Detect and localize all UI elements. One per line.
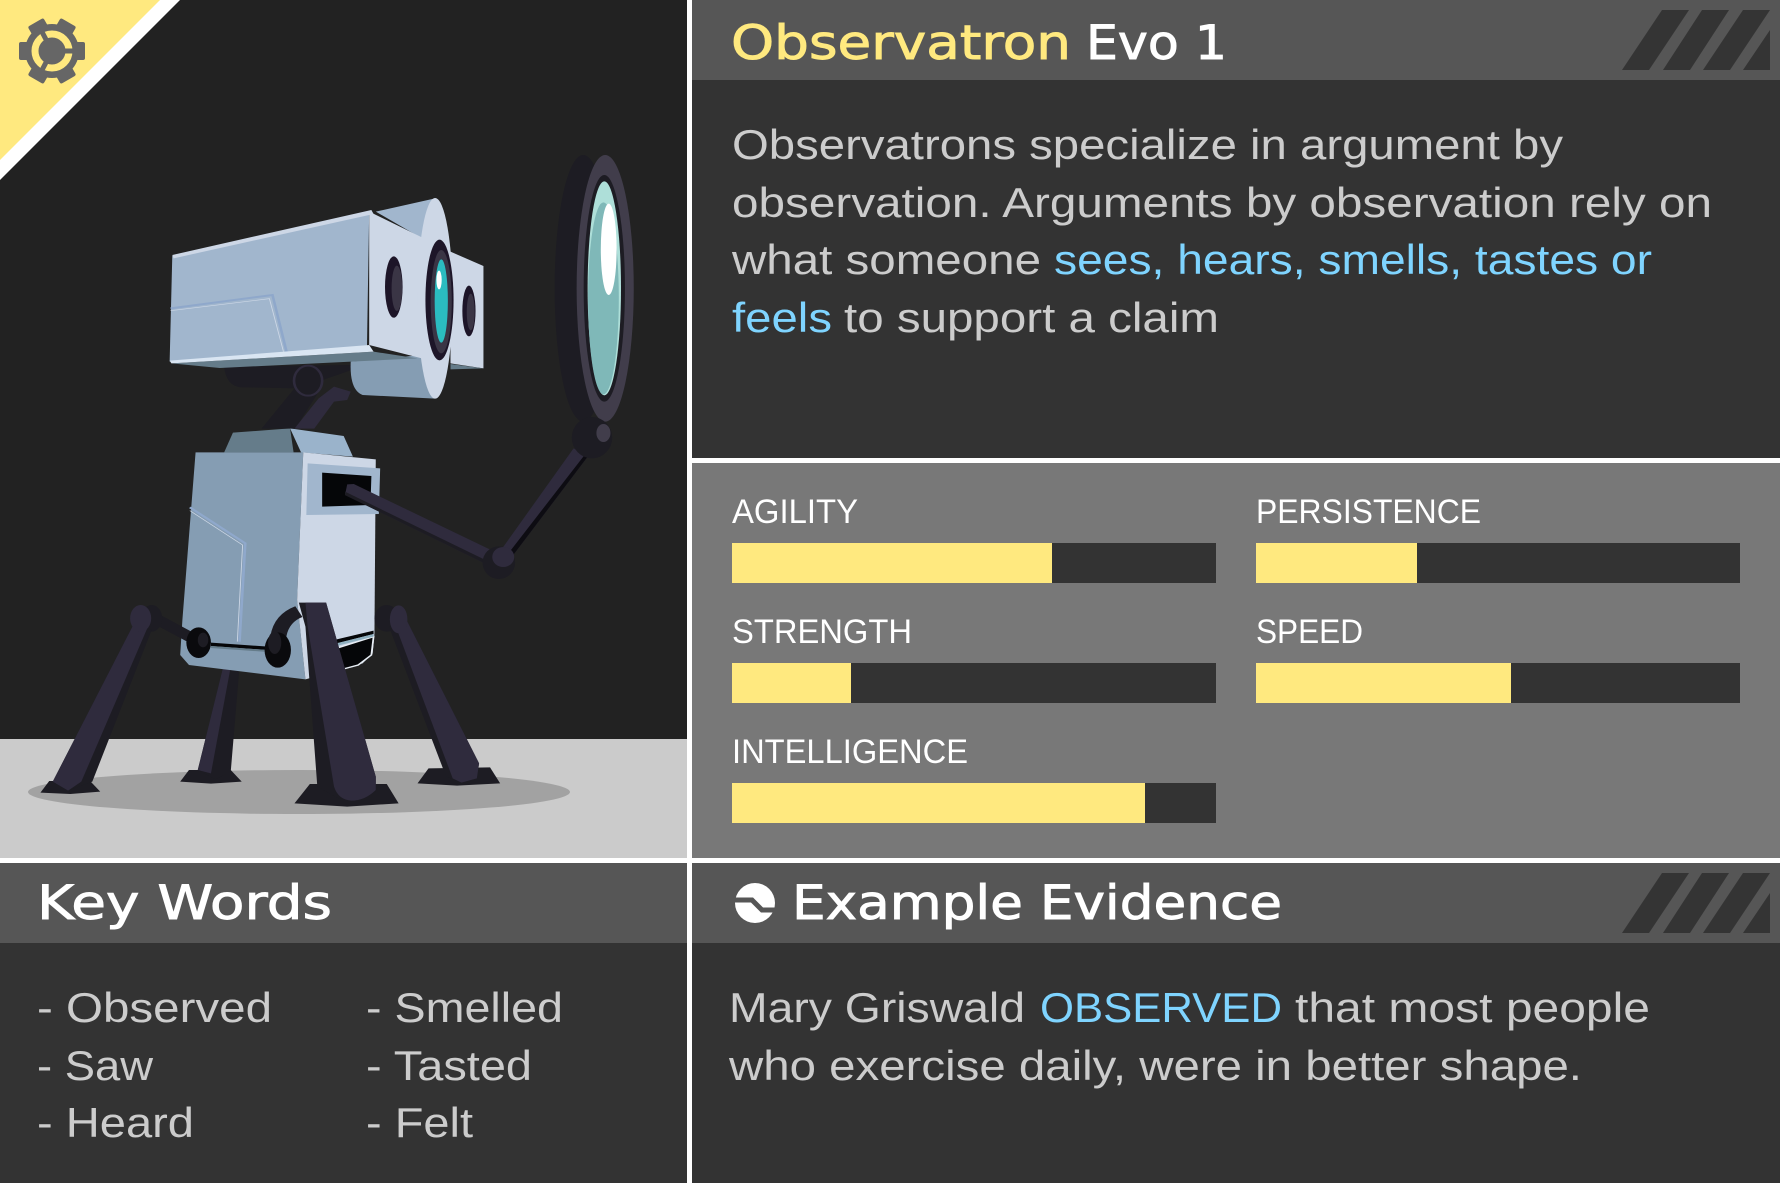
- ground shadow: [28, 770, 570, 814]
- hazard stripes: [1622, 10, 1770, 70]
- corner badge: [0, 0, 180, 180]
- panel: key words: [0, 863, 687, 1183]
- evidence text: that most people: [1295, 984, 1650, 1031]
- evidence text: OBSERVED: [1040, 984, 1282, 1031]
- hazard stripes: [1622, 873, 1770, 933]
- key words list: left column: - Heard: [37, 1099, 194, 1146]
- stat: strength: STRENGTH: [732, 613, 912, 651]
- description text: feels: [732, 294, 832, 341]
- back right leg: [374, 605, 500, 786]
- neck: [224, 365, 352, 429]
- stat: persistence: [1256, 493, 1740, 583]
- panel: title and description: [692, 0, 1780, 458]
- robot: head and magnifier: [170, 155, 634, 458]
- evidence text: [728, 984, 1650, 1089]
- evidence text: Mary Griswald: [729, 984, 1025, 1031]
- key words list: right column: - Smelled: [366, 984, 563, 1031]
- heading: Key Words: Key Words: [37, 876, 332, 931]
- title bar: [692, 0, 1780, 80]
- description text: [731, 121, 1712, 341]
- evidence text: who exercise daily, were in better shape.: [728, 1042, 1582, 1089]
- robot torso: [180, 428, 380, 679]
- description text: to support a claim: [844, 294, 1219, 341]
- heading: Observatron Evo 1: [731, 16, 1227, 71]
- stat: agility: [732, 493, 1216, 583]
- camera head: [170, 198, 483, 399]
- stat: agility: AGILITY: [732, 493, 858, 531]
- key words list: left column: - Saw: [37, 1042, 154, 1089]
- stat: speed: SPEED: [1256, 613, 1363, 651]
- key words list: left column: - Observed: [37, 984, 272, 1031]
- description text: what someone: [731, 236, 1041, 283]
- extending arm: [345, 448, 589, 579]
- description text: Observatrons specialize in argument by: [732, 121, 1563, 168]
- key words list: right column: [366, 984, 563, 1146]
- heading: Observatron Evo 1: Evo 1: [1086, 16, 1227, 71]
- camera lens: main teal: [425, 240, 454, 360]
- stat: intelligence: [732, 733, 1216, 823]
- icon: gear logo: [19, 18, 85, 84]
- key words list: right column: - Felt: [366, 1099, 473, 1146]
- robot: legs and body: [40, 428, 589, 807]
- stat: speed: [1256, 613, 1740, 703]
- panel: stats: [692, 463, 1780, 858]
- front leg: [265, 603, 399, 807]
- key words list: left column: [37, 984, 272, 1146]
- heading: Observatron Evo 1: Observatron: [731, 16, 1071, 71]
- panel: example evidence: [692, 863, 1780, 1183]
- floor: [0, 739, 687, 858]
- camera lens: right: [462, 286, 476, 336]
- panel: robot illustration: [0, 0, 687, 858]
- heading: Example Evidence: Example Evidence: [792, 876, 1282, 931]
- description text: observation. Arguments by observation rely on: [732, 179, 1712, 226]
- stat: strength: [732, 613, 1216, 703]
- icon: wave circle: [733, 883, 777, 923]
- key words list: right column: - Tasted: [366, 1042, 532, 1089]
- magnifying glass: [555, 155, 634, 458]
- back left leg: [40, 605, 211, 794]
- description text: sees, hears, smells, tastes or: [1054, 236, 1652, 283]
- camera lens: left: [385, 256, 403, 318]
- back middle leg: [180, 667, 242, 784]
- stat: persistence: PERSISTENCE: [1256, 493, 1481, 531]
- stat: intelligence: INTELLIGENCE: [732, 733, 968, 771]
